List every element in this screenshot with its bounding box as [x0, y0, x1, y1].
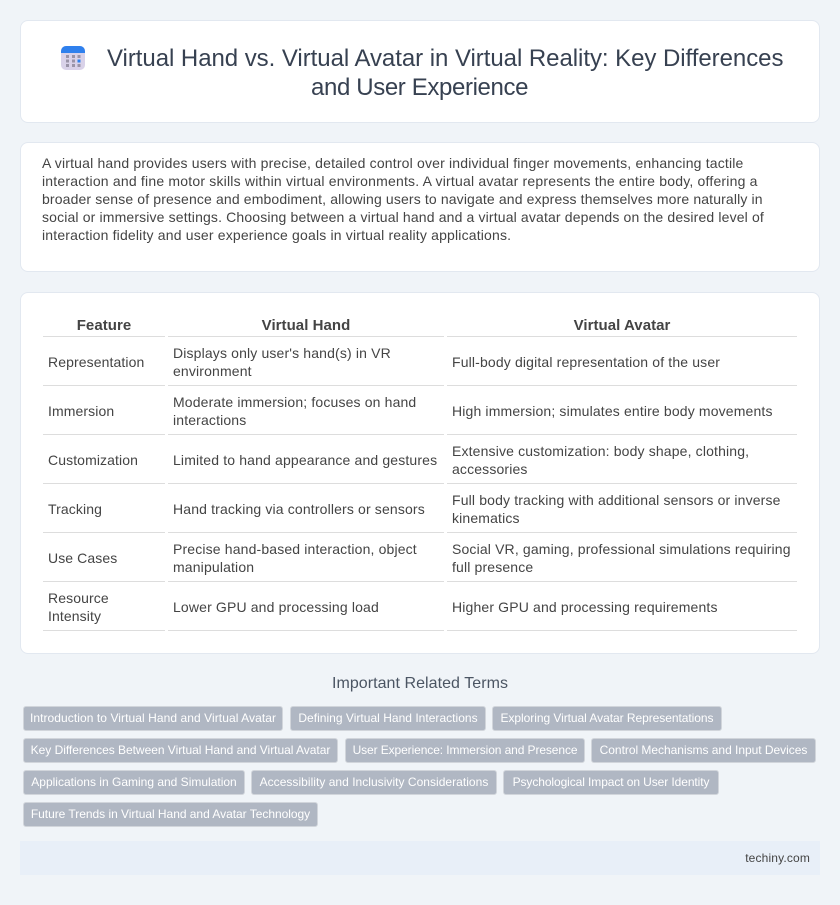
title [107, 45, 783, 101]
row: Resource Intensity: Intensity [48, 608, 101, 624]
row: Immersion, Virtual Avatar: High immersion; simulates entire body movements [452, 403, 773, 419]
related terms tags: Future Trends in Virtual Hand and Avatar Technology [31, 807, 310, 821]
related terms tags: Exploring Virtual Avatar Representations [500, 711, 714, 725]
header card [20, 20, 820, 123]
row: Use Cases, Virtual Hand [173, 541, 417, 575]
table header: Feature: Feature [77, 317, 131, 334]
related terms tags: User Experience: Immersion and Presence [353, 743, 577, 757]
row: Representation: Representation [48, 354, 144, 370]
row: Use Cases, Virtual Avatar: Social VR, gaming, professional simulations requiring [452, 541, 791, 557]
row: Tracking, Virtual Avatar [452, 492, 781, 526]
related terms tags: Psychological Impact on User Identity [513, 775, 709, 789]
intro text: interaction and fine motor skills within virtual environments. A virtual avatar represents the entire body, offering a [42, 173, 758, 189]
row: Immersion, Virtual Hand [173, 394, 416, 428]
title: and User Experience [311, 74, 528, 101]
row: Resource Intensity [48, 590, 109, 624]
related terms tags: Defining Virtual Hand Interactions [298, 711, 478, 725]
row: Representation, Virtual Hand: environment [173, 363, 252, 379]
row: Resource Intensity, Virtual Hand: Lower GPU and processing load [173, 599, 379, 615]
footer credit: techiny.com [745, 851, 810, 865]
footer bar [20, 841, 820, 875]
intro text: social or immersive settings. Choosing between a virtual hand and a virtual avatar depends on the desired level of [42, 209, 764, 225]
intro text [42, 155, 764, 243]
row: Resource Intensity: Resource [48, 590, 109, 606]
row: Use Cases, Virtual Avatar [452, 541, 791, 575]
row: Immersion, Virtual Hand: Moderate immersion; focuses on hand [173, 394, 416, 410]
intro card [20, 142, 820, 272]
related terms tags: Control Mechanisms and Input Devices [600, 743, 807, 757]
row: Customization, Virtual Avatar [452, 443, 749, 477]
row: Use Cases, Virtual Avatar: full presence [452, 559, 533, 575]
row: Use Cases: Use Cases [48, 550, 117, 566]
row: Representation, Virtual Avatar: Full-body digital representation of the user [452, 354, 720, 370]
related terms tags: Key Differences Between Virtual Hand and Virtual Avatar [31, 743, 330, 757]
row: Resource Intensity, Virtual Avatar: Higher GPU and processing requirements [452, 599, 718, 615]
row: Customization, Virtual Avatar: accessories [452, 461, 528, 477]
row: Tracking: Tracking [48, 501, 102, 517]
row: Customization, Virtual Hand: Limited to hand appearance and gestures [173, 452, 437, 468]
row: Immersion: Immersion [48, 403, 114, 419]
intro text: broader sense of presence and embodiment, allowing users to navigate and express themselves more naturally in [42, 191, 763, 207]
table card [20, 292, 820, 654]
row: Tracking, Virtual Avatar: Full body tracking with additional sensors or inverse [452, 492, 781, 508]
related terms heading: Important Related Terms [332, 675, 508, 692]
row: Tracking, Virtual Avatar: kinematics [452, 510, 520, 526]
table header: Virtual Avatar: Virtual Avatar [574, 317, 670, 334]
title: Virtual Hand vs. Virtual Avatar in Virtual Reality: Key Differences [107, 45, 783, 72]
related terms tags: Applications in Gaming and Simulation [31, 775, 237, 789]
icon: calendar grid [61, 46, 85, 70]
row: Immersion, Virtual Hand: interactions [173, 412, 246, 428]
row: Representation, Virtual Hand: Displays only user's hand(s) in VR [173, 345, 391, 361]
table header: Virtual Hand: Virtual Hand [262, 317, 350, 334]
row: Use Cases, Virtual Hand: manipulation [173, 559, 254, 575]
related terms tags [23, 706, 816, 827]
comparison table [43, 336, 797, 631]
row: Representation, Virtual Hand [173, 345, 391, 379]
intro text: interaction fidelity and user experience goals in virtual reality applications. [42, 227, 511, 243]
related terms tags: Accessibility and Inclusivity Considerations [260, 775, 488, 789]
intro text: A virtual hand provides users with precise, detailed control over individual finger movements, enhancing tactile [42, 155, 744, 171]
row: Tracking, Virtual Hand: Hand tracking via controllers or sensors [173, 501, 425, 517]
related terms tags: Introduction to Virtual Hand and Virtual Avatar [30, 711, 276, 725]
row: Use Cases, Virtual Hand: Precise hand-based interaction, object [173, 541, 417, 557]
row: Customization, Virtual Avatar: Extensive customization: body shape, clothing, [452, 443, 749, 459]
row: Customization: Customization [48, 452, 138, 468]
